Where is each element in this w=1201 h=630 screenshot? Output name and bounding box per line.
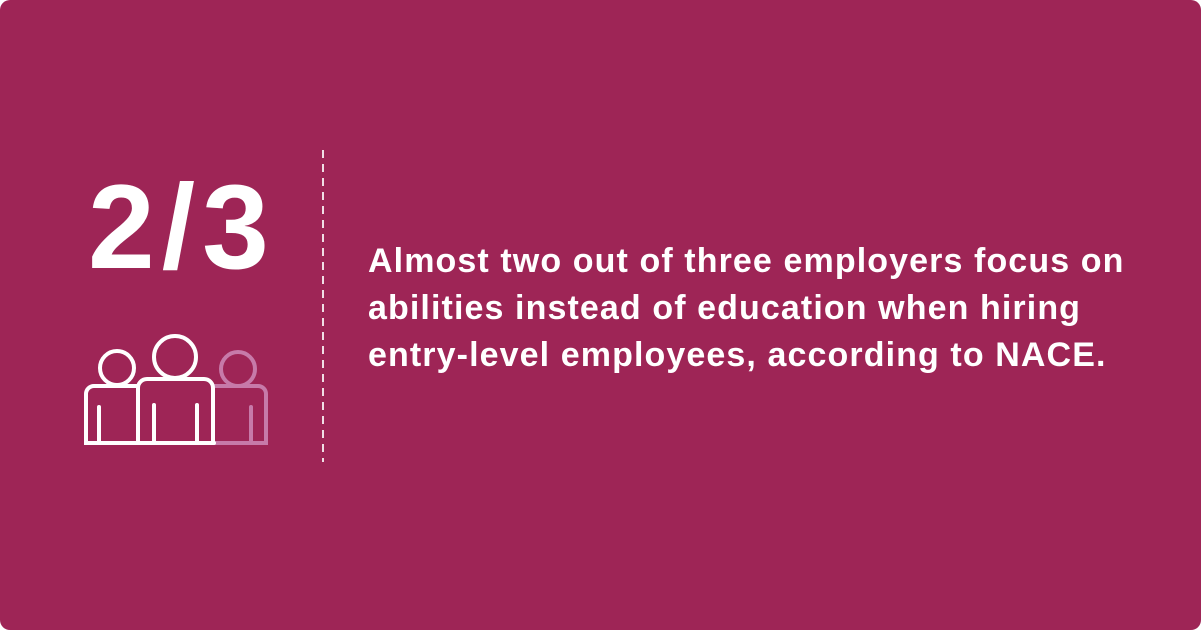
text block: description: entry-level employees, according to NACE. bbox=[368, 336, 1107, 374]
stat number: 2/3 bbox=[88, 160, 276, 294]
text block: description: abilities instead of education when hiring bbox=[368, 289, 1081, 327]
text block: description: Almost two out of three employers focus on bbox=[368, 242, 1124, 280]
icon: people group bbox=[84, 150, 324, 462]
text block: description bbox=[368, 242, 1124, 374]
divider bbox=[322, 150, 324, 462]
